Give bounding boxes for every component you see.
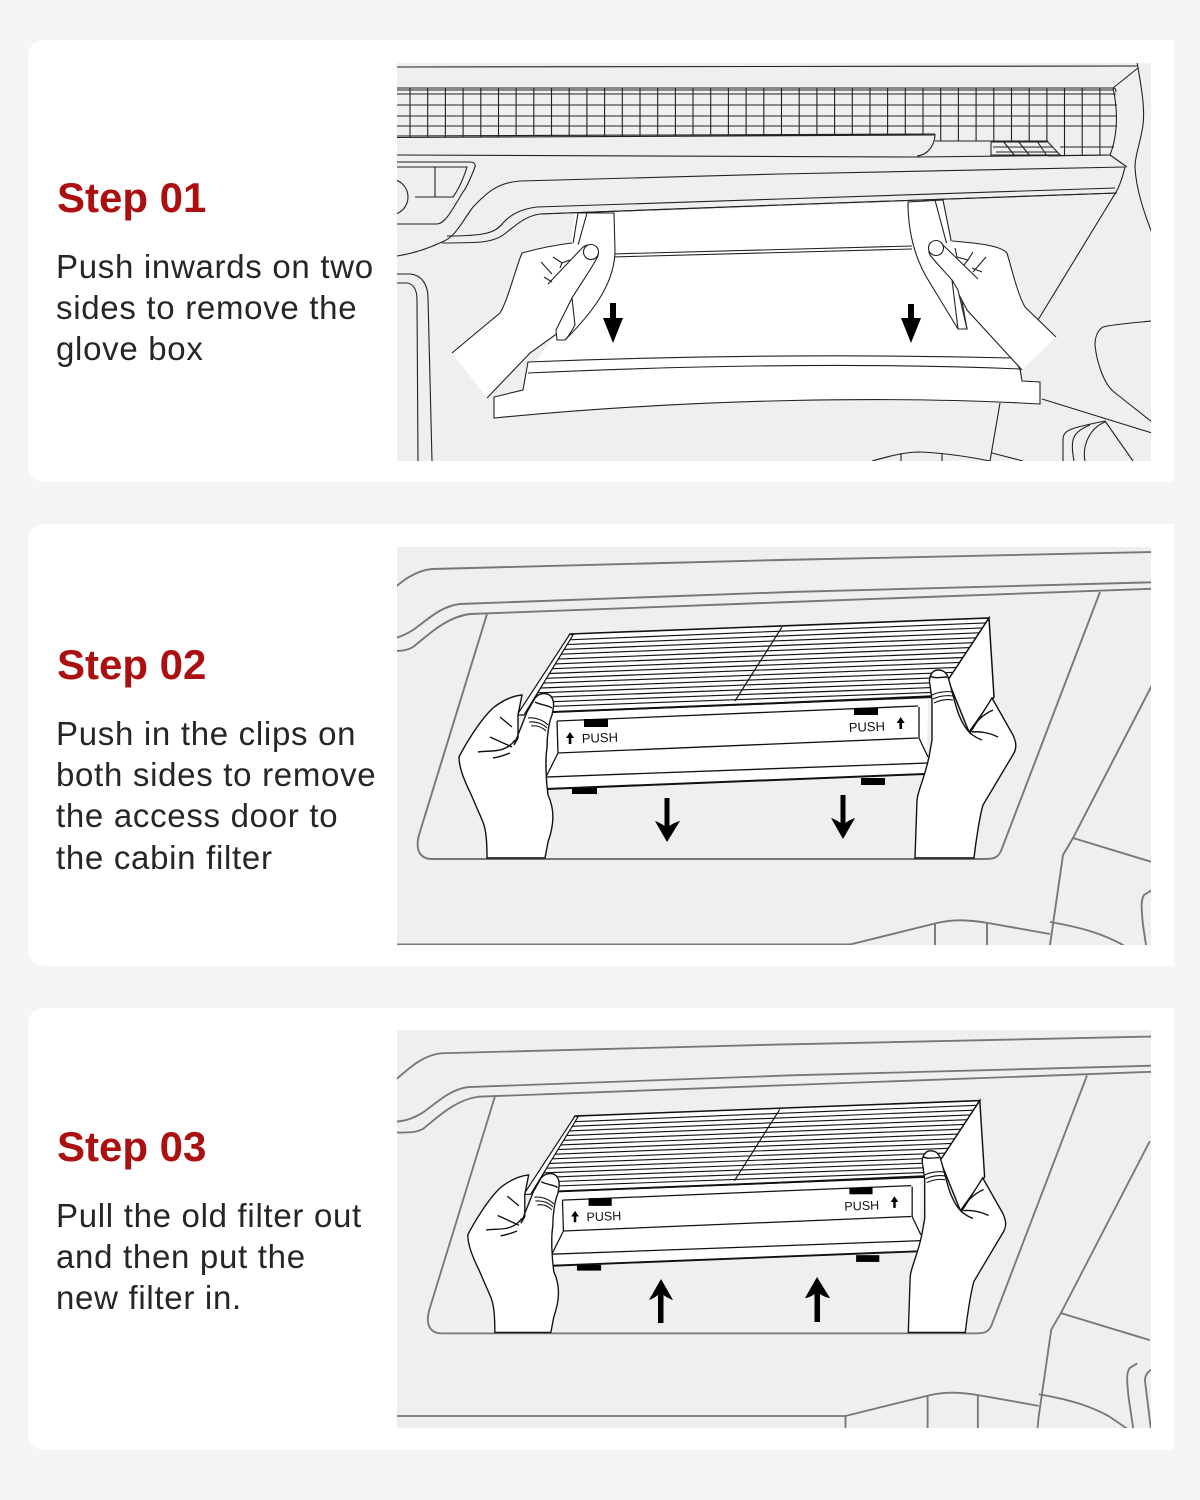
- right hand: [908, 1151, 1006, 1332]
- filter access door: [546, 697, 928, 794]
- dashboard grille: [397, 66, 1137, 157]
- car interior outline: [380, 551, 1200, 965]
- small push arrows: [571, 1196, 898, 1222]
- left hand: [459, 694, 554, 858]
- filter with hands: [468, 1101, 1006, 1332]
- right hand: [915, 670, 1016, 858]
- text: step 01 instructions: [56, 248, 374, 367]
- push label left: PUSH: [582, 730, 618, 746]
- text: step 03 instructions: new filter in.: [56, 1279, 242, 1316]
- text: step 03 instructions: [56, 1197, 362, 1316]
- panel: step 02 card: [28, 524, 1174, 966]
- text: step 02 instructions: [56, 715, 376, 876]
- door clips: [577, 1188, 879, 1271]
- left hand: [468, 1174, 559, 1332]
- illustration: replacing filter: [397, 1030, 1151, 1428]
- filter side face: [940, 1101, 985, 1211]
- filter with hands: [459, 618, 1016, 858]
- heading: step 03: Step 03: [57, 1123, 206, 1170]
- text: step 01 instructions: Push inwards on two: [56, 248, 374, 285]
- heading: step 01: Step 01: [57, 174, 206, 221]
- right hand: [928, 240, 1056, 370]
- panel: step 01 card: [28, 40, 1174, 482]
- left release arm: [557, 213, 615, 340]
- push label left: PUSH: [586, 1209, 622, 1224]
- arrow: up left: [649, 1279, 673, 1323]
- arrow: left down: [603, 303, 623, 343]
- arrow: down left: [655, 798, 680, 842]
- text: step 02 instructions: the cabin filter: [56, 839, 273, 876]
- arrow: down right: [831, 795, 855, 839]
- text: step 03 instructions: Pull the old filter out: [56, 1197, 362, 1234]
- small push arrows: [566, 717, 905, 744]
- filter access door: [552, 1177, 921, 1271]
- door clips: [572, 708, 885, 794]
- heading: step 02: Step 02: [57, 641, 206, 688]
- glove box door: [494, 193, 1117, 418]
- illustration: glove box removal: [397, 63, 1151, 461]
- illustration: removing access door: [397, 547, 1151, 945]
- text: step 01 instructions: glove box: [56, 330, 204, 367]
- text: step 01 instructions: sides to remove the: [56, 289, 357, 326]
- text: step 03 instructions: and then put the: [56, 1238, 306, 1275]
- panel: step 03 card: [28, 1008, 1174, 1450]
- car interior outline: [391, 1036, 1184, 1436]
- filter side face: [948, 618, 994, 732]
- pleated filter top: [517, 618, 989, 715]
- left hand: [452, 243, 598, 398]
- arrow: right down: [901, 304, 921, 343]
- text: step 02 instructions: Push in the clips on: [56, 715, 356, 752]
- arrow: up right: [805, 1277, 830, 1322]
- push label right: PUSH: [844, 1198, 879, 1214]
- right release arm: [908, 200, 967, 329]
- text: step 02 instructions: both sides to remove: [56, 756, 376, 793]
- text: step 02 instructions: the access door to: [56, 797, 338, 834]
- pleated filter top: [524, 1101, 980, 1194]
- dashboard trim and vents: [372, 62, 1152, 461]
- push label right: PUSH: [849, 719, 885, 735]
